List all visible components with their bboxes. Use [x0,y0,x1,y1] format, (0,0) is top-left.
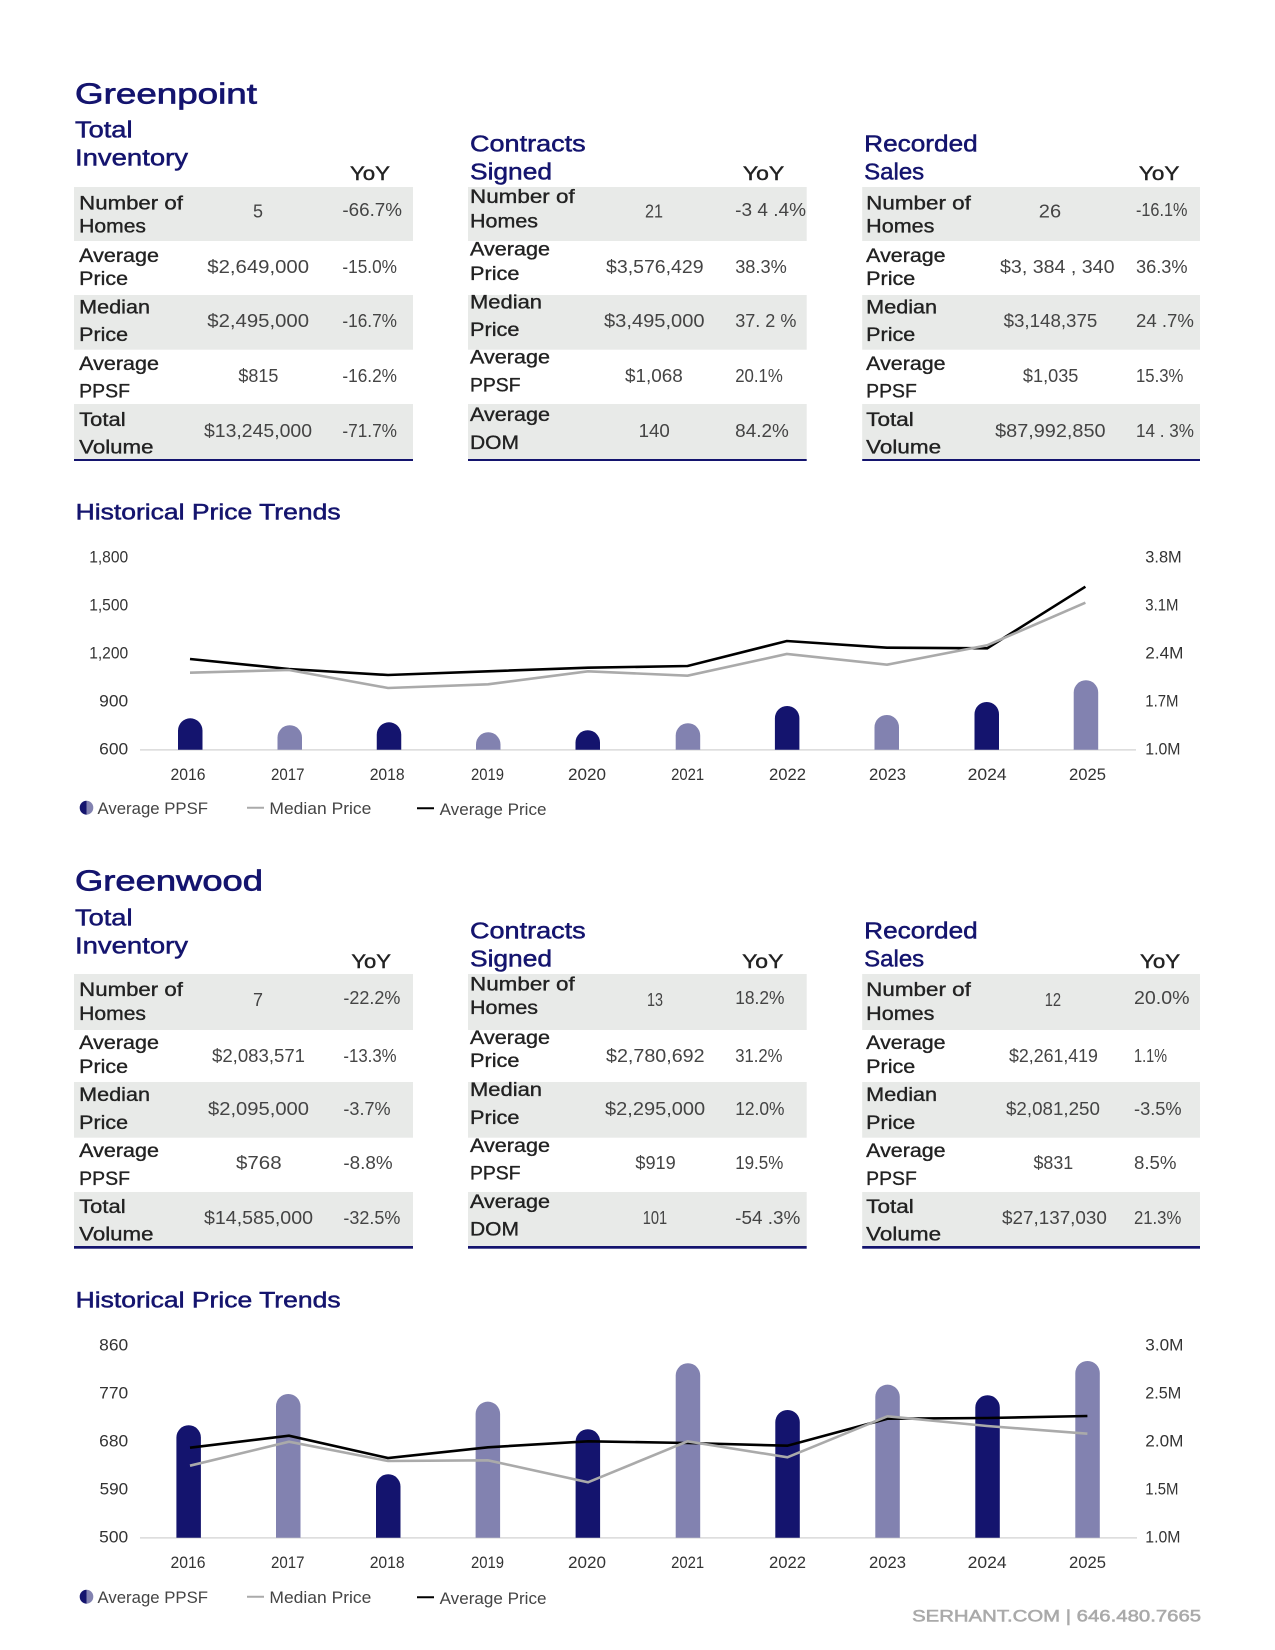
year labels: 2020 [568,1554,606,1572]
table rows: $2,780,692 [606,1045,705,1066]
chart: Greenwood historical price trends [80,1337,1183,1608]
panel: Greenwood recorded sales [862,918,1200,1249]
table rows: $2,295,000 [605,1098,705,1119]
table rows: 5 [253,200,263,222]
left axis labels: 860 [99,1337,128,1355]
table rows: $13,245,000 [204,420,312,441]
heading: Recorded Sales: Recorded [864,131,978,157]
table rows: 12 [1045,989,1061,1010]
table rows: Average [470,1136,550,1157]
right axis labels: 3.0M [1145,1337,1183,1355]
right axis labels: 1.0M [1145,1529,1180,1547]
left axis labels: 770 [99,1385,128,1403]
year labels: 2016 [170,766,206,784]
column header: YoY: YoY [1140,951,1180,973]
table rows: 13 [647,989,663,1010]
table rows: 38.3% [735,256,787,277]
table rows: Average [866,354,946,375]
heading: Total Inventory: Inventory [75,932,189,958]
right axis labels: 3.8M [1145,549,1182,567]
year labels [170,766,1106,784]
table rows: 8.5% [1134,1152,1176,1173]
heading: Contracts Signed [470,918,586,972]
left axis labels: 590 [100,1481,128,1499]
column header: YoY: YoY [350,163,390,185]
legend [80,1588,546,1608]
table rows: Price [79,1057,128,1078]
bars: average PPSF [176,1361,1100,1538]
table rows: Average [79,1033,159,1054]
table rows: PPSF [470,1164,520,1185]
legend: Median Price [269,799,371,818]
panel: Greenwood contracts signed [468,918,807,1249]
year labels: 2016 [170,1554,206,1572]
table rows: $3,148,375 [1004,310,1097,331]
right axis labels: 2.0M [1145,1433,1183,1451]
table rows: $2,495,000 [207,310,309,331]
table rows: $2,649,000 [207,256,309,277]
title: Greenwood: Greenwood [75,865,263,897]
section: Greenpoint [74,78,1200,819]
table rows [468,187,807,461]
column header: YoY: YoY [1139,163,1179,185]
column header: YoY: YoY [743,163,784,185]
table rows: Number of [866,980,972,1001]
table rows: Total [79,410,126,431]
table rows: -8.8% [343,1152,393,1173]
table rows: $831 [1034,1152,1073,1173]
table rows: 21.3% [1134,1207,1181,1228]
panel: Greenpoint contracts signed [468,131,807,461]
legend: Average PPSF [98,799,208,818]
table rows: 36.3% [1136,256,1188,277]
right axis labels: 2.5M [1145,1385,1181,1403]
table rows: Total [866,410,914,431]
table rows: Total [79,1197,126,1218]
table rows: PPSF [470,376,520,397]
year labels: 2018 [370,766,405,784]
left axis labels: 900 [99,693,128,711]
heading: Recorded Sales [864,918,978,972]
heading: Contracts Signed: Contracts [470,131,586,157]
left axis labels: 1,800 [89,549,128,567]
legend: Average Price [440,1589,546,1608]
line: average price [190,1416,1087,1458]
table rows: Average [79,246,159,267]
year labels: 2024 [968,1554,1007,1572]
table rows: $1,068 [625,365,683,386]
table rows: 7 [253,989,263,1010]
table rows: 1.1% [1134,1045,1167,1066]
table rows: -3.7% [343,1098,391,1119]
table rows: 15.3% [1136,365,1183,386]
table rows: -54 .3% [735,1207,800,1228]
table rows: Number of [79,193,184,214]
year labels: 2024 [968,766,1007,784]
table rows [468,974,807,1249]
table rows: Average [79,354,159,375]
heading: Contracts Signed: Signed [470,158,552,184]
footer: contact: SERHANT.COM | 646.480.7665 [912,1607,1201,1626]
table rows: -22.2% [343,987,400,1008]
table rows: $87,992,850 [995,420,1106,441]
legend: Average Price [440,800,546,819]
table rows: Price [866,1113,915,1134]
table rows: -32.5% [343,1207,400,1228]
right axis labels: 3.1M [1145,597,1178,615]
left axis labels: 600 [99,741,128,759]
table rows: $2,095,000 [208,1098,309,1119]
year labels: 2025 [1069,766,1106,784]
table rows: Number of [866,193,972,214]
heading: Recorded Sales: Sales [864,158,924,184]
chart: Greenpoint historical price trends [80,549,1183,819]
section: Greenwood [74,865,1200,1608]
table rows: 37. 2 % [735,310,796,331]
table rows: Price [866,269,915,290]
left axis labels: 1,200 [89,645,128,663]
table rows: Average [470,405,550,426]
line: median price [190,1416,1087,1482]
table rows: Number of [470,975,576,996]
table rows: Volume [866,1225,941,1246]
year labels: 2017 [271,766,304,784]
line: median price [190,603,1085,688]
table rows: Average [79,1141,159,1162]
right axis labels: 1.0M [1145,741,1180,759]
year labels: 2021 [671,766,704,784]
table rows: Median [79,1085,150,1106]
right axis labels: 1.7M [1145,693,1178,711]
table rows: Number of [79,980,184,1001]
table rows: -71.7% [342,420,397,441]
year labels: 2019 [471,1554,504,1572]
legend: Median Price [269,1588,371,1607]
table rows: 84.2% [735,420,789,441]
line: average price [190,587,1085,675]
heading: Contracts Signed: Contracts [470,918,586,944]
table rows: 101 [643,1207,667,1228]
year labels: 2025 [1069,1554,1106,1572]
panel: Greenpoint recorded sales [862,131,1200,461]
table rows: 31.2% [735,1045,782,1066]
table rows [74,187,413,461]
heading: Total Inventory: Total [75,116,132,142]
legend: Average PPSF [98,1588,208,1607]
table rows: 21 [645,200,663,222]
table rows: -16.1% [1136,199,1187,220]
table rows: Volume [866,438,941,459]
table rows: Total [866,1197,914,1218]
year labels: 2017 [271,1554,304,1572]
column header: YoY: YoY [742,951,783,973]
year labels: 2022 [769,1554,806,1572]
column header: YoY: YoY [351,951,391,973]
table rows: $2,261,419 [1009,1045,1098,1066]
table rows: -3.5% [1134,1098,1182,1119]
table rows: Average [470,240,550,261]
title: Greenpoint: Greenpoint [75,78,257,110]
table rows: -3 4 .4% [735,199,806,220]
table rows: Volume [79,438,154,459]
table rows [74,974,413,1249]
table rows: $27,137,030 [1002,1207,1107,1228]
table rows: 14 . 3% [1136,420,1194,441]
year labels: 2022 [769,766,806,784]
table rows: Average [866,1141,946,1162]
year labels: 2018 [370,1554,405,1572]
table rows: Volume [79,1225,154,1246]
table rows: Homes [79,216,146,237]
heading: Recorded Sales: Recorded [864,918,978,944]
table rows: -13.3% [343,1045,397,1066]
table rows: Price [79,325,128,346]
table rows: $2,083,571 [212,1045,305,1066]
table rows: 20.0% [1134,987,1190,1008]
table rows: Median [470,292,542,313]
left axis labels [89,549,128,759]
year labels: 2023 [869,1554,906,1572]
table rows: Price [79,1113,128,1134]
panel: Greenwood total inventory [74,904,413,1249]
table rows: 12.0% [735,1098,784,1119]
right axis labels: 2.4M [1145,645,1183,663]
table rows: PPSF [866,382,917,403]
left axis labels [99,1337,128,1547]
table rows: DOM [470,1220,519,1241]
table rows: Average [470,348,550,369]
right axis labels: 1.5M [1145,1481,1178,1499]
table rows: PPSF [866,1169,917,1190]
right axis labels [1145,549,1183,759]
table rows: -66.7% [342,199,402,220]
heading: Historical Price Trends: Historical Price Trends [76,1287,341,1312]
table rows: Homes [866,1004,934,1025]
table rows: Average [866,1033,946,1054]
table rows: -16.2% [342,365,397,386]
table rows: Average [470,1192,550,1213]
table rows: Homes [866,216,934,237]
table rows: Price [79,269,128,290]
table rows [862,187,1200,461]
table rows: -15.0% [342,256,397,277]
table rows [862,974,1200,1249]
table rows: $2,081,250 [1006,1098,1100,1119]
left axis labels: 1,500 [89,597,128,615]
year labels: 2020 [568,766,606,784]
table rows: 18.2% [735,987,784,1008]
table rows: DOM [470,433,519,454]
table rows: $919 [635,1152,676,1173]
table rows: $3, 384 , 340 [1000,256,1114,277]
table rows: Homes [470,998,538,1019]
table rows: $3,576,429 [606,256,704,277]
table rows: Price [866,325,915,346]
table rows: 26 [1039,200,1061,222]
table rows: Median [866,1085,937,1106]
table rows: Homes [470,211,538,232]
panel: Greenpoint total inventory [74,116,413,461]
table rows: Median [866,297,937,318]
table rows: PPSF [79,1169,130,1190]
table rows: Price [866,1057,915,1078]
heading: Recorded Sales: Sales [864,946,924,972]
heading: Total Inventory [75,116,189,171]
table rows: PPSF [79,382,130,403]
heading: Total Inventory: Inventory [75,145,189,171]
table rows: 24 .7% [1136,310,1194,331]
right axis labels [1145,1337,1183,1547]
table rows: Price [470,1108,520,1129]
left axis labels: 680 [99,1433,128,1451]
table rows: 20.1% [735,365,783,386]
heading: Total Inventory [75,904,189,958]
table rows: $815 [238,365,278,386]
table rows: Median [79,297,150,318]
table rows: $3,495,000 [604,310,705,331]
heading: Contracts Signed: Signed [470,946,552,972]
table rows: 19.5% [735,1152,783,1173]
heading: Recorded Sales [864,131,978,184]
table rows: $14,585,000 [204,1207,313,1228]
table rows: Median [470,1080,542,1101]
heading: Total Inventory: Total [75,904,132,930]
table rows: Homes [79,1004,146,1025]
year labels: 2021 [671,1554,704,1572]
table rows: Price [470,264,520,285]
year labels: 2019 [471,766,504,784]
table rows: $1,035 [1023,365,1078,386]
table rows: Average [866,246,946,267]
heading: Historical Price Trends: Historical Price Trends [76,499,341,524]
table rows: $768 [236,1152,282,1173]
table rows: Price [470,1051,520,1072]
table rows: Number of [470,187,576,208]
year labels: 2023 [869,766,906,784]
legend [80,799,546,819]
table rows: 140 [639,420,670,441]
year labels [170,1554,1106,1572]
table rows: Average [470,1028,550,1049]
heading: Contracts Signed [470,131,586,184]
table rows: -16.7% [342,310,397,331]
bars: average PPSF [178,680,1098,750]
left axis labels: 500 [99,1529,128,1547]
table rows: Price [470,320,520,341]
